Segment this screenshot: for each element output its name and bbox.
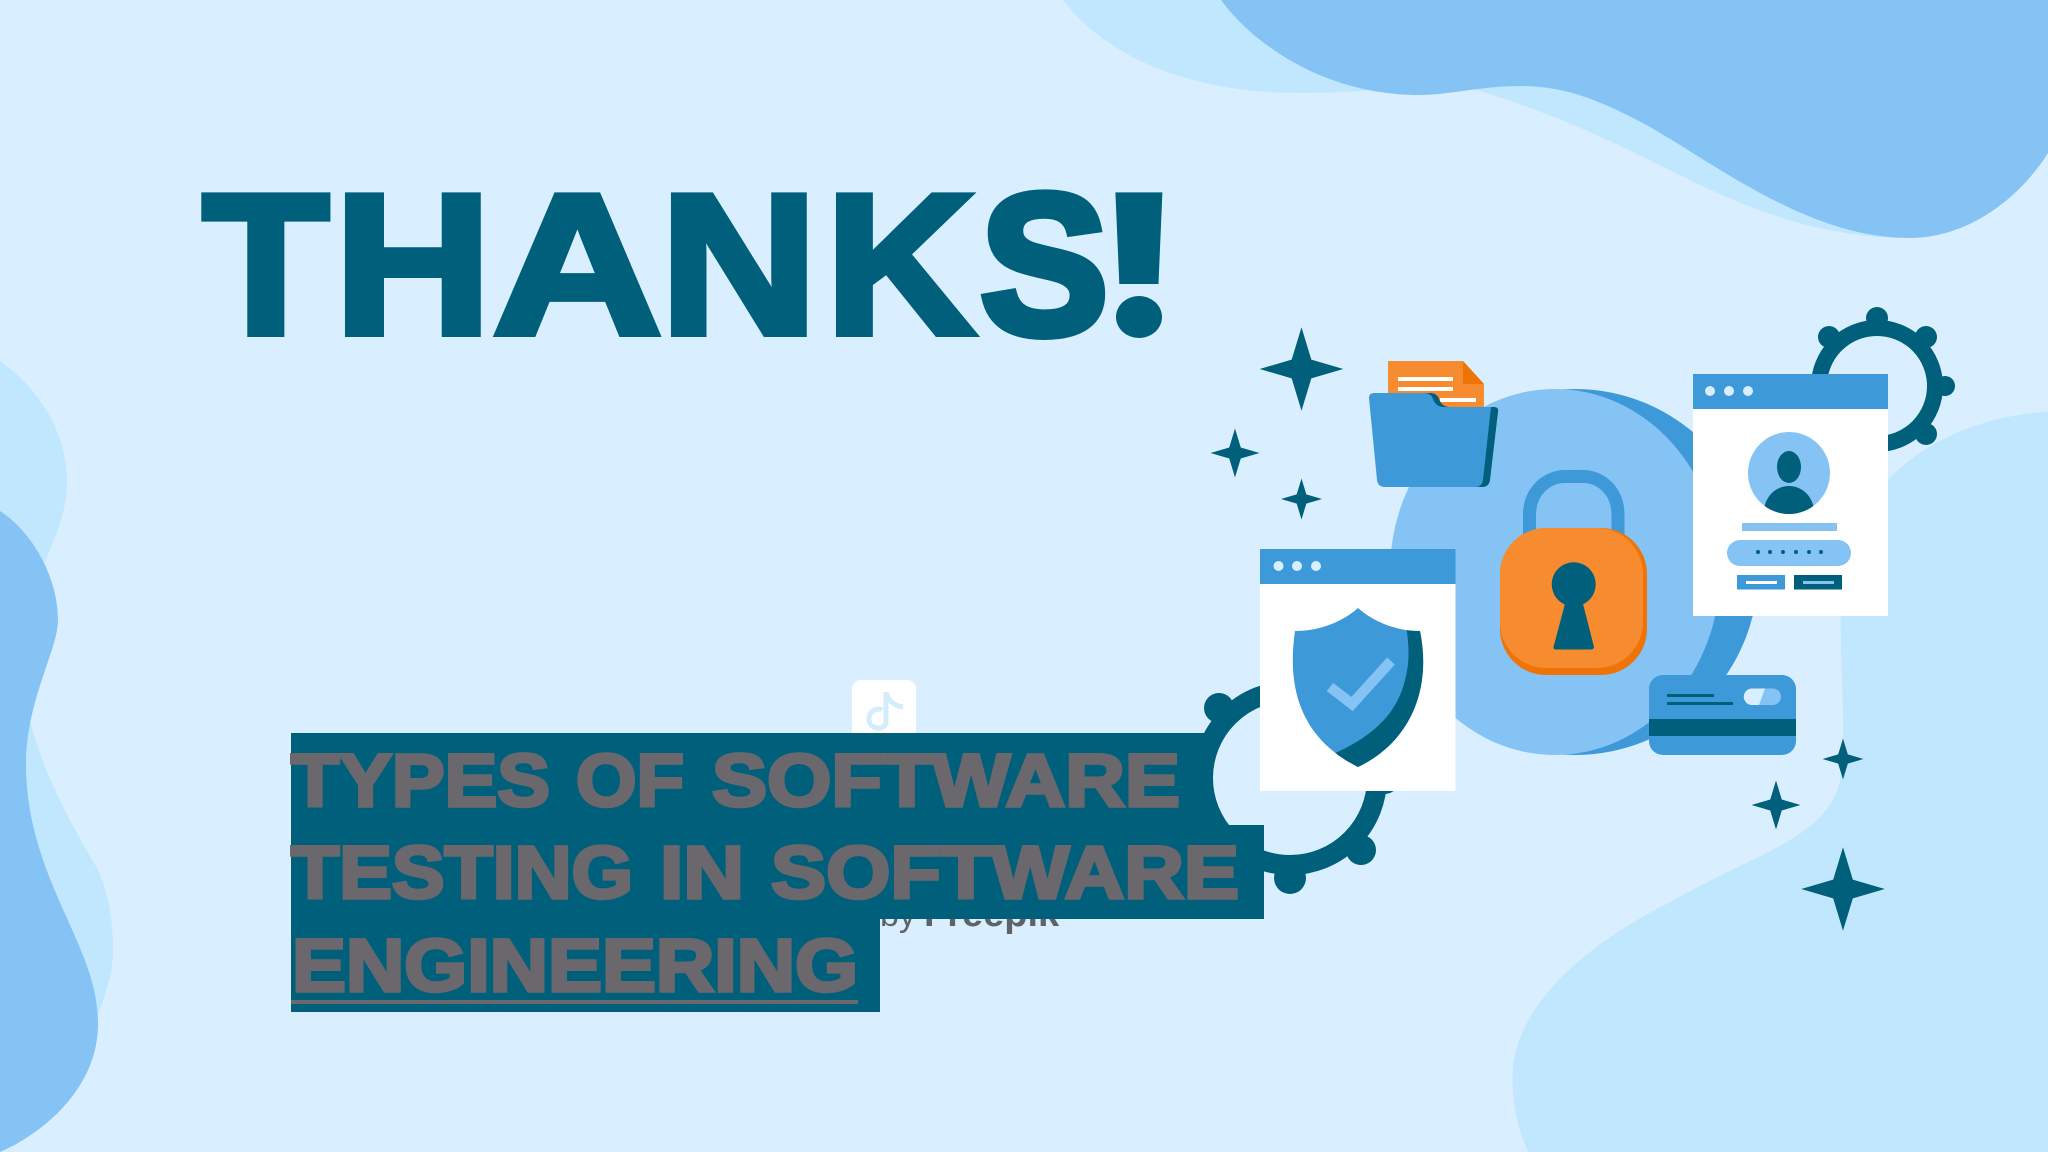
gear: bottom left <box>1203 691 1399 894</box>
title: THANKS!: ! <box>1096 153 1183 376</box>
icon: shield check <box>1293 608 1430 775</box>
title: THANKS!: K <box>826 153 975 377</box>
icon: folder with document <box>1369 361 1498 487</box>
password field <box>1727 540 1851 566</box>
blob: left dark <box>0 511 98 1152</box>
icon: user avatar <box>1748 432 1830 514</box>
highlight: line 3 <box>291 918 880 1012</box>
highlight: line 2 <box>291 825 1264 919</box>
blob: top right light <box>1063 0 2048 238</box>
highlight: line 1 <box>291 733 1205 826</box>
title: THANKS!: T <box>203 154 329 377</box>
window: shield <box>1260 549 1456 791</box>
sparkles <box>1210 327 1885 931</box>
heading lines: SOFTWARE <box>712 739 1180 822</box>
icon: tiktok badge <box>852 680 916 750</box>
illustration: security <box>1203 307 1955 931</box>
heading lines: TESTING <box>291 831 633 914</box>
button: left <box>1737 575 1785 590</box>
title: THANKS! <box>201 189 1162 340</box>
heading lines: SOFTWARE <box>771 831 1239 914</box>
credit: by Freepik: by <box>880 896 916 934</box>
credit: by Freepik: Freepik <box>924 893 1060 935</box>
highlighted heading <box>291 733 1264 1012</box>
circle backdrop <box>1390 389 1758 755</box>
title: THANKS!: N <box>660 154 818 377</box>
heading lines: OF <box>576 739 684 822</box>
blob: top right dark <box>1221 0 2048 238</box>
title: THANKS!: S <box>980 153 1108 376</box>
username field <box>1742 523 1837 531</box>
button: right <box>1794 575 1842 590</box>
heading lines: ENGINEERING <box>292 924 858 1007</box>
icon: padlock <box>1500 476 1647 675</box>
underline <box>291 1000 858 1004</box>
blob: bottom right light <box>1512 411 2048 1152</box>
icon: credit card <box>1649 675 1796 755</box>
heading lines: TYPES <box>291 739 550 822</box>
heading lines: IN <box>660 831 744 914</box>
gear: top right <box>1818 307 1955 445</box>
title: THANKS!: H <box>334 154 492 377</box>
window: login <box>1693 374 1888 616</box>
blob: left light <box>0 361 113 1152</box>
title: THANKS!: A <box>493 153 662 377</box>
heading lines <box>291 739 1239 1007</box>
